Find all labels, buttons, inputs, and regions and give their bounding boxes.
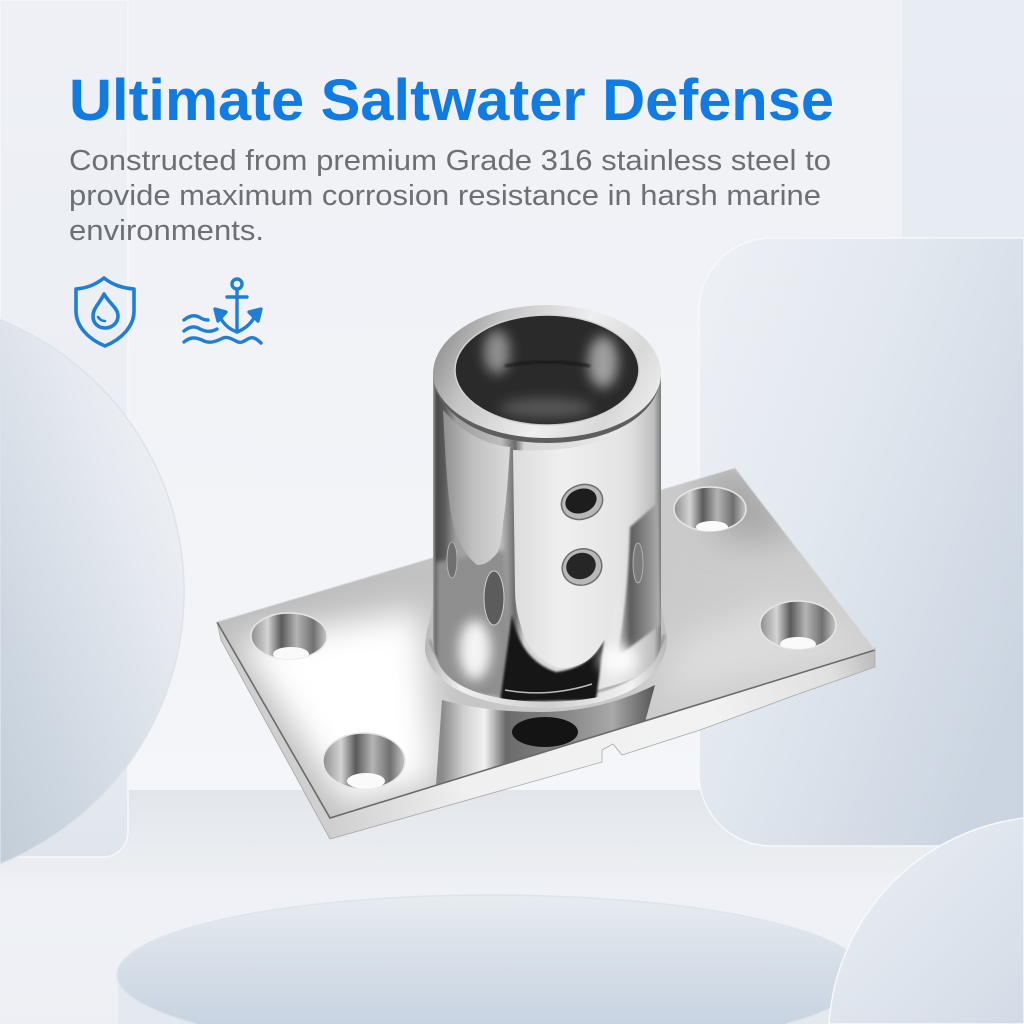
bright centre reflection bbox=[513, 446, 604, 668]
title: Ultimate Saltwater Defense bbox=[69, 68, 834, 133]
flange reflection bbox=[436, 685, 655, 785]
plate top surface bbox=[217, 468, 875, 818]
panel: left glass rounded rectangle bbox=[0, 0, 128, 857]
description text: provide maximum corrosion resistance in harsh marine bbox=[69, 180, 821, 212]
dark wedge under centre bbox=[500, 615, 604, 702]
panel: lower right glass circle bbox=[829, 818, 1024, 1024]
flange bbox=[425, 590, 667, 708]
panel: right glass rounded rectangle bbox=[699, 238, 1024, 846]
description text bbox=[69, 145, 831, 247]
countersink holes bbox=[251, 487, 836, 789]
set screw holes bbox=[556, 479, 608, 591]
description text: environments. bbox=[69, 215, 264, 247]
lower left reflection bbox=[436, 550, 512, 700]
description text: Constructed from premium Grade 316 stainless steel to bbox=[69, 145, 831, 177]
plate edge bbox=[217, 622, 875, 839]
icon: shield with water drop bbox=[76, 278, 134, 346]
right dark reflection bbox=[617, 503, 660, 657]
cylinder rim and bore bbox=[433, 305, 661, 443]
side slots bbox=[447, 542, 457, 578]
cylinder body bbox=[433, 375, 661, 694]
left highlight lobe bbox=[443, 410, 510, 565]
icon: anchor with waves bbox=[184, 279, 261, 343]
panel: left glass circle bbox=[0, 320, 184, 864]
panel: glass disc pedestal bbox=[117, 895, 865, 1024]
product: stainless steel rail base bbox=[217, 305, 875, 839]
